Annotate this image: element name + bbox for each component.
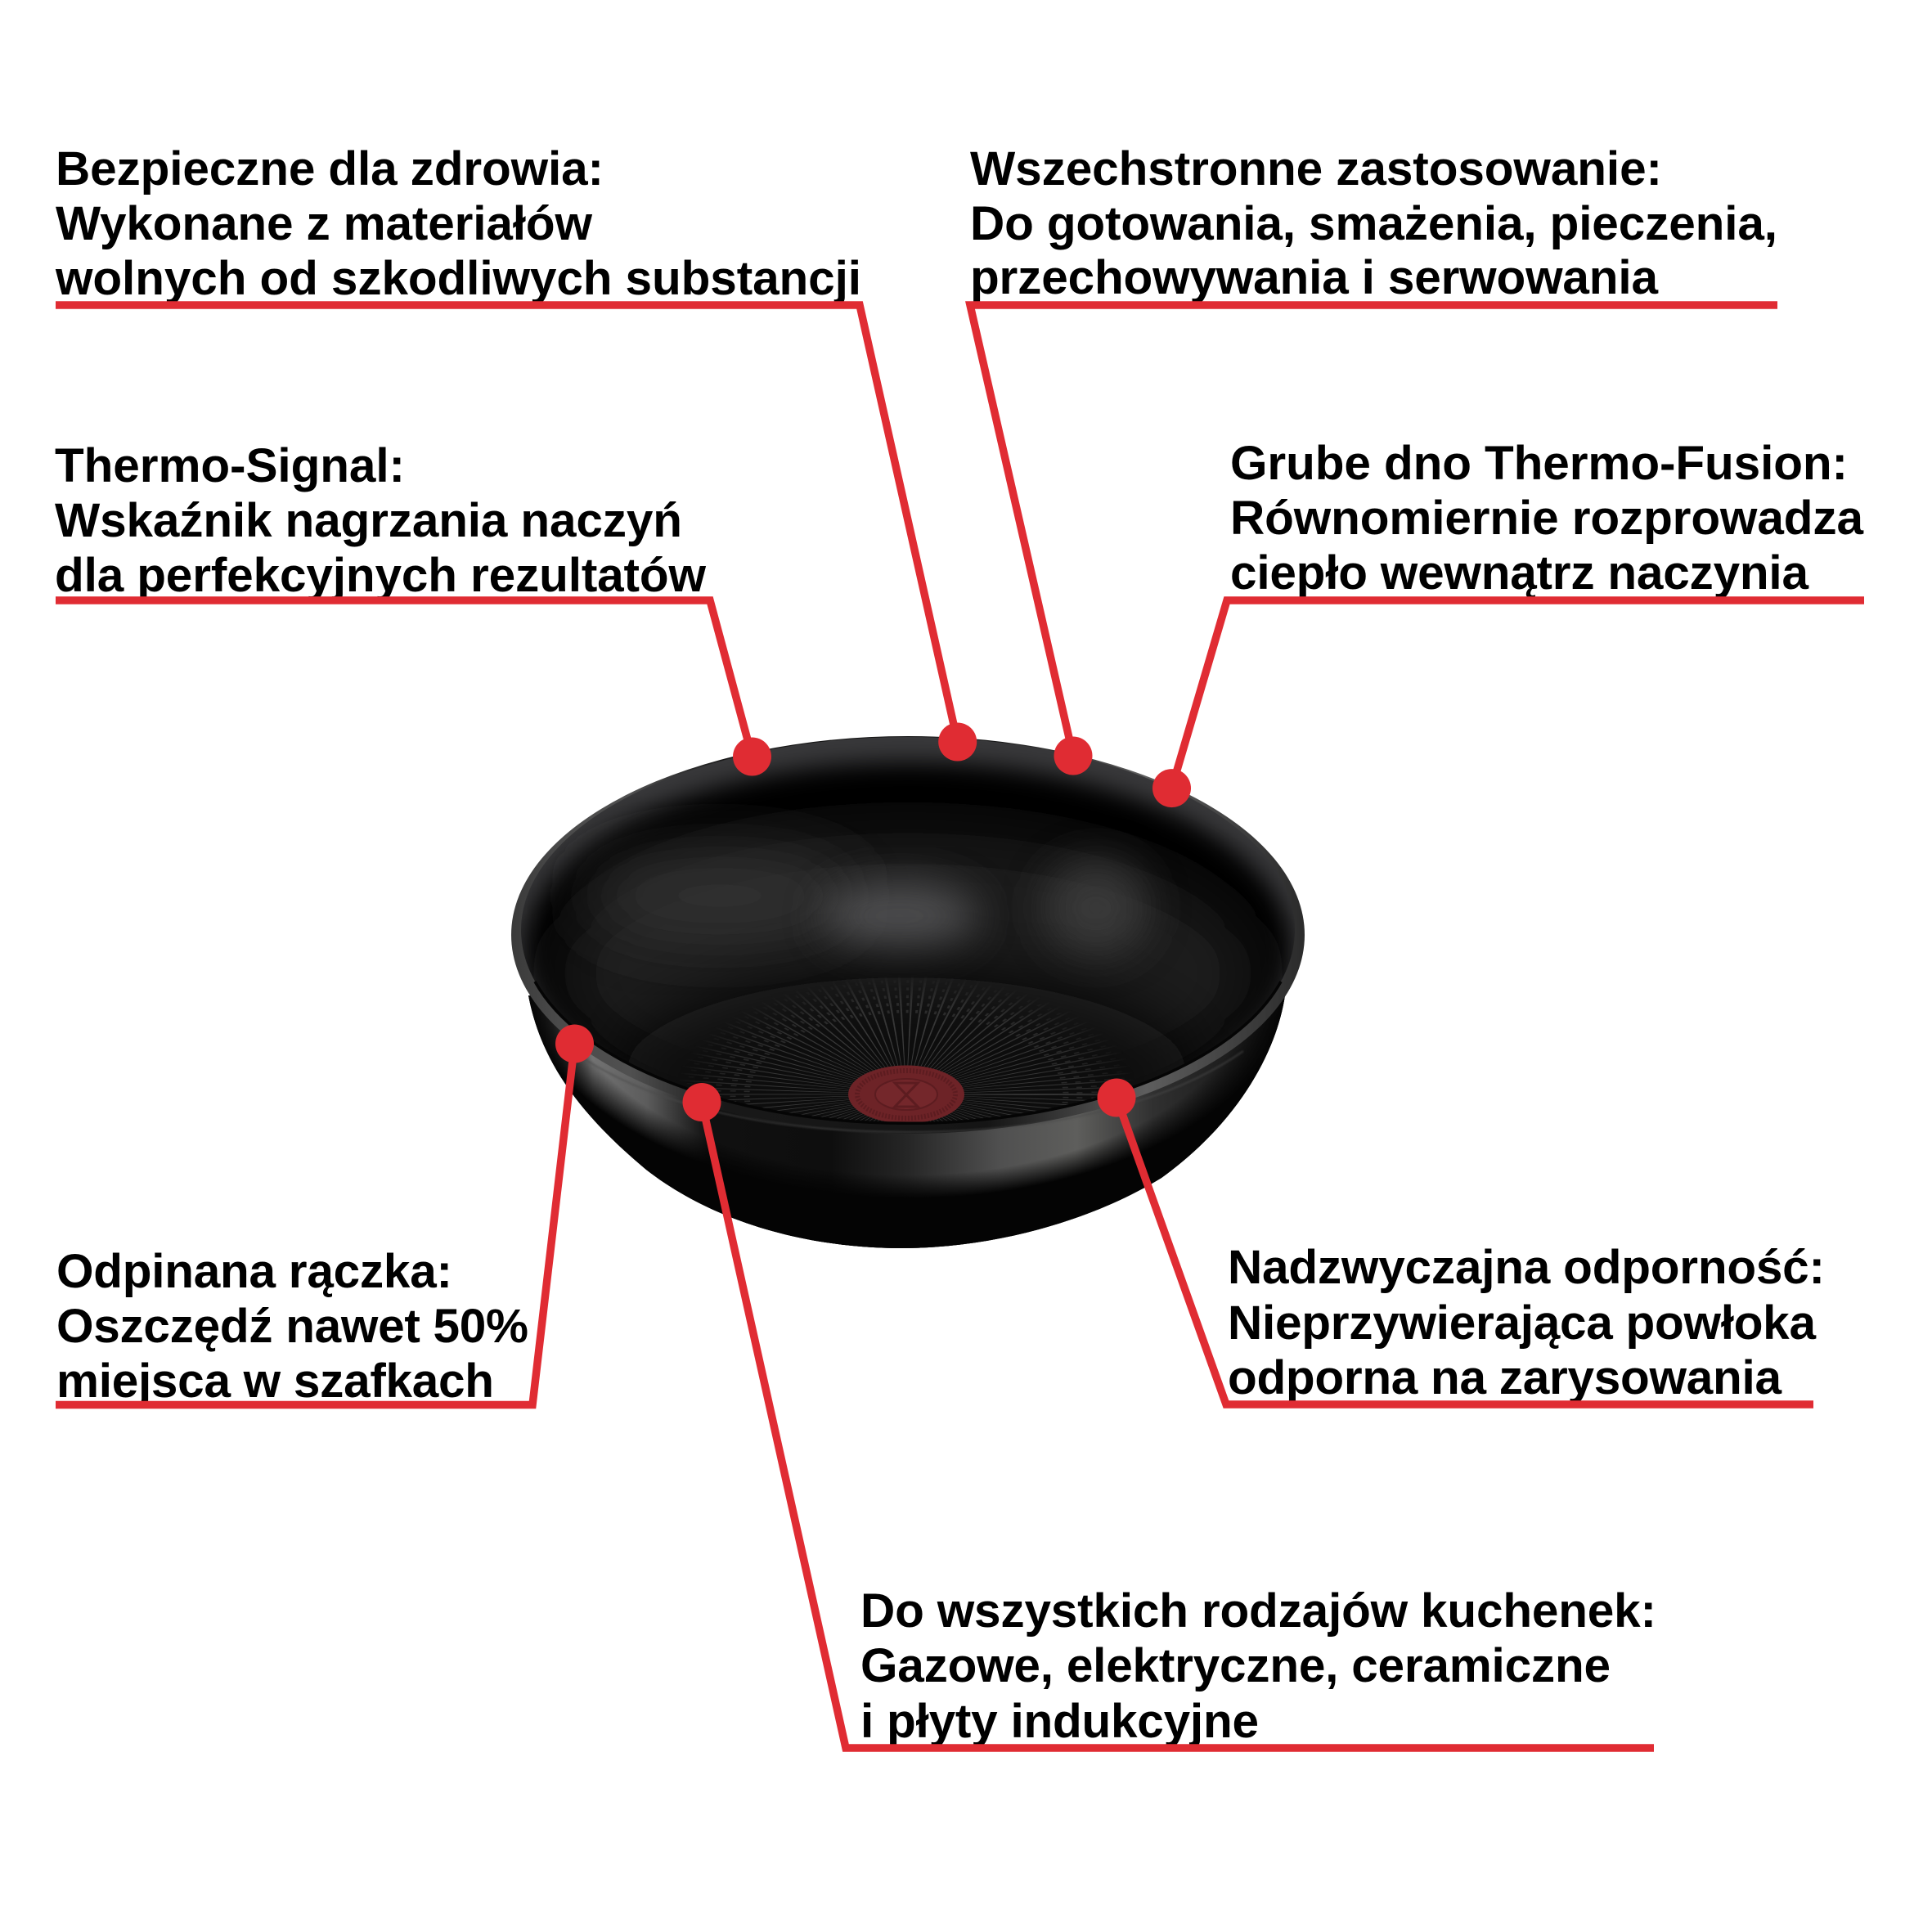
callout text [55, 439, 706, 602]
thermo-signal red spot [848, 1065, 964, 1124]
callout text [1230, 437, 1863, 600]
callout text: wolnych od szkodliwych substancji [55, 252, 861, 305]
marker dot [555, 1024, 594, 1063]
leader line [970, 305, 1777, 756]
callout text: Thermo-Signal: [55, 439, 405, 492]
callout: Odpinana rączka [56, 1024, 594, 1408]
leader line [56, 1044, 574, 1405]
callout text [56, 1245, 528, 1408]
pan illustration: black wok [507, 728, 1309, 1256]
callout text: i płyty indukcyjne [860, 1695, 1259, 1748]
callout text: dla perfekcyjnych rezultatów [55, 549, 706, 602]
callout text: Wszechstronne zastosowanie: [970, 142, 1662, 195]
leader line [1171, 600, 1864, 789]
leader line [56, 305, 958, 742]
callout text: Nieprzywierająca powłoka [1228, 1296, 1816, 1350]
callout text: Gazowe, elektryczne, ceramiczne [860, 1639, 1611, 1692]
callout: Grube dno Thermo-Fusion [1152, 437, 1864, 807]
leader line [56, 600, 753, 757]
pan interior [521, 737, 1295, 1122]
callout text: miejsca w szafkach [56, 1355, 494, 1408]
callout text: Do wszystkich rodzajów kuchenek: [860, 1584, 1656, 1638]
callout text [860, 1584, 1656, 1748]
callout text: Równomiernie rozprowadza [1230, 492, 1863, 545]
marker dot [1152, 769, 1191, 807]
callout text: Wskaźnik nagrzania naczyń [55, 494, 682, 547]
callout text [970, 142, 1777, 304]
pan floor with radial texture [692, 983, 1119, 1122]
pan rim [511, 736, 1305, 1134]
pan outer body [528, 995, 1285, 1248]
callout text: Oszczędź nawet 50% [56, 1300, 528, 1353]
marker dot [682, 1083, 721, 1121]
callout text: ciepło wewnątrz naczynia [1230, 546, 1808, 600]
callout text: Grube dno Thermo-Fusion: [1230, 437, 1848, 490]
marker dot [1098, 1078, 1135, 1117]
callout: Do wszystkich rodzajów kuchenek [682, 1083, 1656, 1748]
callout: Bezpieczne dla zdrowia [55, 142, 977, 761]
callout text: Odpinana rączka: [56, 1245, 452, 1298]
leader line [702, 1103, 1654, 1748]
marker dot [1054, 736, 1093, 775]
marker dot [733, 738, 771, 775]
callout: Wszechstronne zastosowanie [970, 142, 1777, 775]
leader line [1117, 1098, 1813, 1404]
marker dot [938, 723, 977, 761]
callout: Nadzwyczajna odporność [1098, 1078, 1825, 1404]
callout text [55, 142, 861, 305]
callout text: Bezpieczne dla zdrowia: [56, 142, 604, 195]
callout text: Do gotowania, smażenia, pieczenia, [970, 197, 1777, 250]
callout text [1228, 1241, 1825, 1404]
callout text: przechowywania i serwowania [970, 251, 1658, 304]
inner wall highlights [581, 851, 1149, 957]
callout: Thermo-Signal [55, 439, 771, 775]
rim front inner edge [535, 982, 1281, 1123]
callout text: odporna na zarysowania [1228, 1351, 1781, 1404]
callout text: Nadzwyczajna odporność: [1228, 1241, 1825, 1294]
callout text: Wykonane z materiałów [56, 197, 592, 250]
inner wall shading [560, 833, 1256, 1114]
